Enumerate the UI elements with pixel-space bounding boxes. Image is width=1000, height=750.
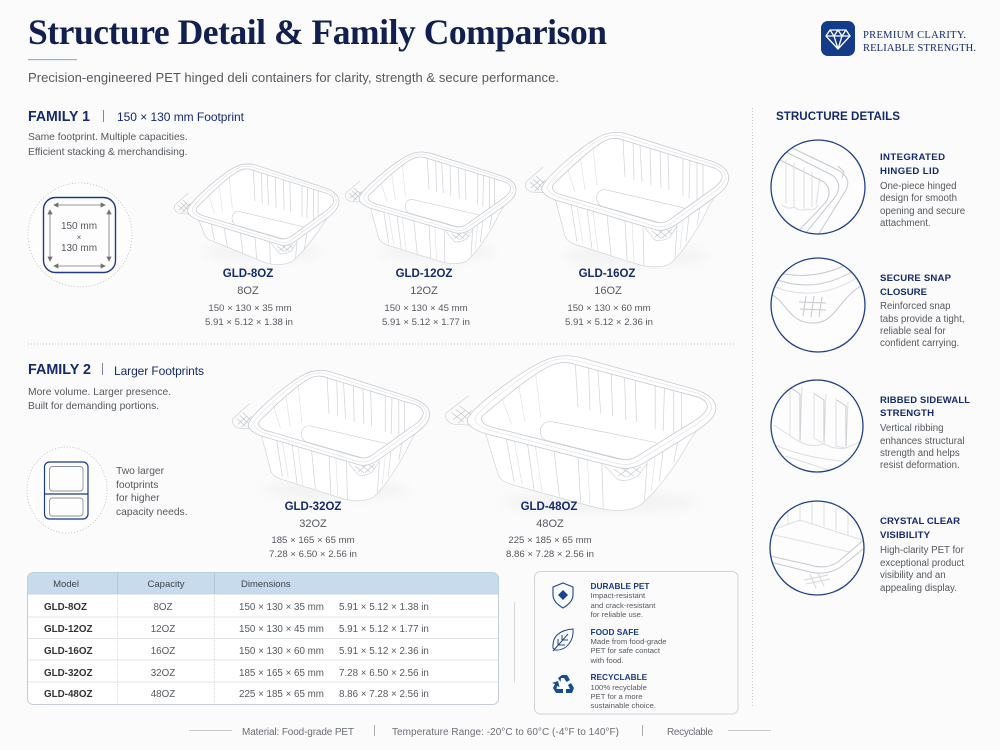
detail text: snap closure: CLOSURE [880, 287, 928, 298]
label 12oz: 5.91 × 5.12 × 1.77 in [382, 317, 470, 328]
detail text: ribbed sidewall: STRENGTH [880, 408, 934, 419]
footprint note: Two larger [116, 466, 165, 477]
family 1 heading: 150 × 130 mm Footprint [117, 110, 245, 124]
table row GLD-32OZ: 32OZ [151, 668, 175, 679]
brand tagline: RELIABLE STRENGTH. [863, 43, 976, 54]
comparison table [28, 572, 498, 704]
detail text: snap closure: tabs provide a tight, [880, 314, 965, 325]
title: Structure Detail & Family Comparison [28, 12, 607, 52]
footprint note: for higher [116, 493, 160, 504]
panel: family 2 [27, 356, 716, 560]
footprint diagram 150 x 130: 150 mm [61, 221, 97, 232]
table row GLD-16OZ: GLD-16OZ [44, 646, 92, 657]
detail text: crystal clear: visibility and an [880, 570, 946, 581]
table row GLD-48OZ: GLD-48OZ [44, 689, 92, 700]
footer spec strip [189, 725, 771, 738]
family 2 description: Built for demanding portions. [28, 401, 159, 412]
container photo 32oz [232, 370, 430, 501]
label 48oz: 8.86 × 7.28 × 2.56 in [506, 549, 594, 560]
table row GLD-32OZ: GLD-32OZ [44, 668, 92, 679]
container photo 16oz [525, 132, 729, 267]
table row GLD-8OZ [44, 602, 429, 613]
label 16oz [565, 268, 653, 328]
subtitle: Precision-engineered PET hinged deli containers for clarity, strength & secure performance. [28, 70, 559, 85]
family 1 description: Same footprint. Multiple capacities. [28, 132, 188, 143]
detail: secure snap closure [770, 258, 965, 352]
detail: integrated hinged lid [771, 140, 965, 240]
detail image: snap tab [770, 258, 870, 352]
brand tagline: PREMIUM CLARITY. [863, 30, 966, 41]
family 1 description: Efficient stacking & merchandising. [28, 147, 188, 158]
food safe text: PET for safe contact [590, 646, 661, 655]
table row GLD-8OZ: 150 × 130 × 35 mm [239, 602, 324, 613]
container photo 12oz [345, 152, 516, 264]
detail text: hinged lid: attachment. [880, 218, 931, 229]
table row GLD-32OZ [44, 668, 429, 679]
detail text: snap closure: Reinforced snap [880, 301, 951, 312]
food safe text: Made from food-grade [590, 637, 667, 646]
table header: Model [53, 579, 79, 590]
table row GLD-12OZ: 12OZ [151, 624, 175, 635]
detail: ribbed sidewall strength [771, 380, 970, 472]
footprint note: footprints [116, 480, 158, 491]
detail text: ribbed sidewall: enhances structural [880, 436, 965, 447]
recyclable text: RECYCLABLE [590, 672, 648, 682]
detail text: crystal clear [880, 516, 965, 594]
label 8oz: 150 × 130 × 35 mm [208, 303, 292, 314]
durable PET text [590, 581, 656, 619]
label 12oz: 12OZ [410, 285, 438, 297]
family 2 heading: Larger Footprints [114, 364, 204, 378]
panel: structure details [770, 110, 970, 595]
detail text: ribbed sidewall [880, 394, 970, 471]
table row GLD-16OZ [44, 646, 429, 657]
label 32oz: 7.28 × 6.50 × 2.56 in [269, 549, 357, 560]
footer spec strip: Temperature Range: -20°C to 60°C (-4°F to 140°F) [392, 727, 619, 738]
table row GLD-48OZ [44, 689, 429, 700]
table row GLD-32OZ: 185 × 165 × 65 mm [239, 668, 324, 679]
detail text: snap closure: reliable seal for [880, 326, 946, 337]
family 2 description: More volume. Larger presence. [28, 387, 171, 398]
label 12oz: 150 × 130 × 45 mm [384, 303, 468, 314]
footer spec strip: Material: Food-grade PET [242, 727, 354, 738]
table header: Capacity [148, 579, 185, 590]
label 32oz: 185 × 165 × 65 mm [271, 535, 355, 546]
product: GLD-8OZ [174, 164, 339, 328]
label 8oz: GLD-8OZ [223, 268, 273, 280]
table row GLD-16OZ: 16OZ [151, 646, 175, 657]
durable PET text: and crack-resistant [590, 601, 656, 610]
product: GLD-48OZ [445, 356, 716, 560]
table row GLD-16OZ: 150 × 130 × 60 mm [239, 646, 324, 657]
label 16oz: 150 × 130 × 60 mm [567, 303, 651, 314]
detail text: ribbed sidewall: Vertical ribbing [880, 423, 944, 434]
icon: diamond [821, 21, 855, 56]
footprint note: capacity needs. [116, 507, 188, 518]
structure details heading: STRUCTURE DETAILS [776, 110, 900, 123]
detail image: ribs [771, 380, 864, 472]
detail text: ribbed sidewall: strength and helps [880, 448, 960, 459]
detail text: crystal clear: VISIBILITY [880, 530, 931, 541]
detail image: clarity [770, 501, 868, 595]
brand tagline [863, 30, 976, 54]
table header: Dimensions [241, 579, 291, 590]
table row GLD-48OZ: 8.86 × 7.28 × 2.56 in [339, 689, 429, 700]
detail text: crystal clear: CRYSTAL CLEAR [880, 516, 960, 527]
label 48oz: 48OZ [536, 518, 564, 530]
container photo 48oz [445, 356, 716, 513]
detail text: crystal clear: exceptional product [880, 558, 964, 569]
footprint diagram: two larger footprints [27, 447, 107, 533]
detail text: ribbed sidewall: resist deformation. [880, 460, 960, 471]
label 16oz: 16OZ [594, 285, 622, 297]
detail text: hinged lid: HINGED LID [880, 166, 939, 177]
food safe text: FOOD SAFE [590, 627, 639, 637]
detail image: hinge [771, 140, 865, 240]
family 2 description [28, 387, 171, 412]
table row GLD-12OZ [44, 624, 429, 635]
table row GLD-12OZ: 150 × 130 × 45 mm [239, 624, 324, 635]
durable PET text: Impact-resistant [590, 591, 646, 600]
table header [53, 579, 291, 590]
label 16oz: GLD-16OZ [579, 268, 635, 280]
food safe text: with food. [590, 656, 623, 665]
label 8oz [205, 268, 293, 328]
label 32oz: 32OZ [299, 518, 327, 530]
recyclable text [590, 672, 656, 710]
footprint diagram 150 x 130: × [77, 233, 82, 242]
label 48oz [506, 501, 594, 560]
family 1 heading: FAMILY 1 [28, 108, 90, 125]
icon: recycle [552, 675, 574, 693]
table row GLD-48OZ: 48OZ [151, 689, 175, 700]
family 2 heading [28, 361, 204, 378]
table row GLD-8OZ: 5.91 × 5.12 × 1.38 in [339, 602, 429, 613]
table row GLD-8OZ: 8OZ [153, 602, 173, 613]
family 1 heading [28, 108, 245, 125]
durable PET text: for reliable use. [590, 610, 643, 619]
detail text: crystal clear: High-clarity PET for [880, 545, 965, 556]
footer spec strip: Recyclable [667, 727, 713, 738]
label 32oz: GLD-32OZ [285, 501, 341, 513]
panel: family 1 [28, 108, 729, 328]
footprint diagram 150 x 130: 130 mm [61, 243, 97, 254]
detail text: snap closure: SECURE SNAP [880, 273, 952, 284]
detail: crystal clear visibility [770, 501, 965, 595]
detail text: hinged lid: opening and secure [880, 206, 965, 217]
recyclable text: PET for a more [590, 692, 642, 701]
recyclable text: 100% recyclable [590, 683, 647, 692]
title underline accent [28, 59, 77, 60]
detail text: hinged lid: INTEGRATED [880, 152, 945, 163]
detail text: crystal clear: appealing display. [880, 583, 957, 594]
footprint diagram 150 x 130 [28, 183, 132, 287]
panel: material benefits [534, 572, 738, 714]
family 2 heading: FAMILY 2 [28, 361, 91, 378]
family 1 description [28, 132, 188, 158]
table row GLD-48OZ: 225 × 185 × 65 mm [239, 689, 324, 700]
label 48oz: GLD-48OZ [521, 501, 577, 513]
product: GLD-16OZ [525, 132, 729, 328]
detail text: snap closure: confident carrying. [880, 338, 959, 349]
label 8oz: 8OZ [237, 285, 259, 297]
label 32oz [269, 501, 357, 560]
label 12oz: GLD-12OZ [396, 268, 452, 280]
detail text: snap closure [880, 273, 965, 349]
detail text: hinged lid [880, 152, 965, 229]
label 16oz: 5.91 × 5.12 × 2.36 in [565, 317, 653, 328]
detail text: hinged lid: One-piece hinged [880, 181, 956, 192]
icon: leaf [553, 629, 573, 651]
label 12oz [382, 268, 470, 328]
durable PET text: DURABLE PET [590, 581, 650, 591]
detail text: ribbed sidewall: RIBBED SIDEWALL [880, 394, 970, 405]
table row GLD-32OZ: 7.28 × 6.50 × 2.56 in [339, 668, 429, 679]
table row GLD-8OZ: GLD-8OZ [44, 602, 87, 613]
recyclable text: sustainable choice. [590, 701, 656, 710]
detail text: hinged lid: design for smooth [880, 193, 957, 204]
table row GLD-16OZ: 5.91 × 5.12 × 2.36 in [339, 646, 429, 657]
icon: shield [553, 583, 573, 608]
container photo 8oz [174, 164, 339, 265]
label 8oz: 5.91 × 5.12 × 1.38 in [205, 317, 293, 328]
label 48oz: 225 × 185 × 65 mm [508, 535, 592, 546]
food safe text [590, 627, 667, 665]
table row GLD-12OZ: 5.91 × 5.12 × 1.77 in [339, 624, 429, 635]
footprint note [116, 466, 188, 518]
brand badge [821, 21, 976, 56]
table row GLD-12OZ: GLD-12OZ [44, 624, 92, 635]
product: GLD-12OZ [345, 152, 516, 328]
product: GLD-32OZ [232, 370, 430, 560]
